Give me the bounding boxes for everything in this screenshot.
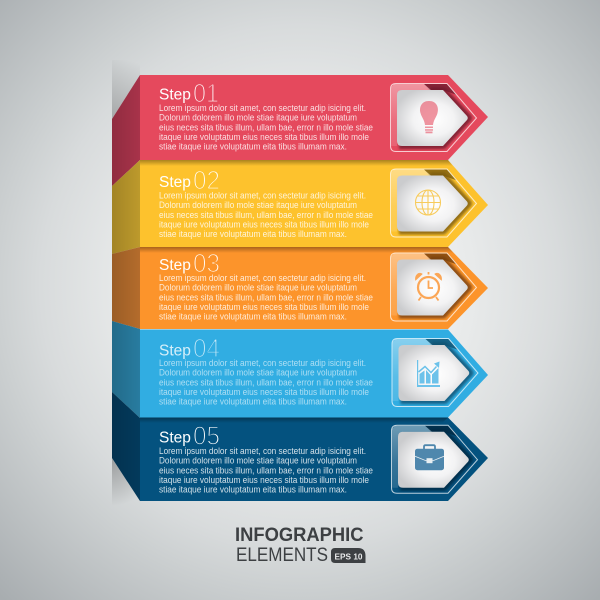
icon card: step 3 [390, 253, 476, 321]
heading: step 3 [159, 248, 220, 278]
text block: step 2: Dolorum dolorem illo mole stiae itaque iure voluptatum [159, 200, 357, 210]
text block: step 5: stiae itaque iure voluptatum eita tibus illumam max. [159, 485, 347, 495]
heading: step 1 [159, 78, 219, 108]
icon: globe [416, 190, 440, 215]
text block: step 5: Lorem ipsum dolor sit amet, con sectetur adip isicing elit. [159, 446, 366, 456]
title line: infographic: INFOGRAPHIC [235, 524, 364, 546]
text block: step 4: itaque iure voluptatum eius neces sita tibus illum illo mole [159, 387, 369, 397]
side faces shading [112, 75, 140, 501]
icon card: step 4 [392, 338, 478, 406]
text block: step 5: eius neces sita tibus illum, ullam bae, error n illo mole stiae [159, 465, 373, 475]
text block: step 1: Lorem ipsum dolor sit amet, con sectetur adip isicing elit. [159, 103, 366, 113]
text block: step 2: stiae itaque iure voluptatum eita tibus illumam max. [159, 229, 347, 239]
text block: step 4: eius neces sita tibus illum, ullam bae, error n illo mole stiae [159, 377, 373, 387]
arrow bar: red [140, 75, 488, 160]
text block: step 1: eius neces sita tibus illum, ullam bae, error n illo mole stiae [159, 122, 373, 132]
heading: step 5: 05 [193, 420, 220, 450]
heading: step 1: Step [159, 86, 191, 104]
heading: step 5 [159, 420, 220, 450]
heading: step 2: 02 [193, 165, 220, 195]
panel: step 1 [112, 75, 488, 186]
text block: step 4: Dolorum dolorem illo mole stiae itaque iure voluptatum [159, 368, 357, 378]
text block: step 5: itaque iure voluptatum eius neces sita tibus illum illo mole [159, 475, 369, 485]
text block: step 3: itaque iure voluptatum eius neces sita tibus illum illo mole [159, 302, 369, 312]
icon: growth chart [417, 360, 440, 387]
heading: step 3: 03 [193, 248, 220, 278]
title [235, 524, 366, 566]
text block: step 2 [159, 190, 373, 239]
side face: yellow [112, 160, 140, 254]
heading: step 4 [159, 333, 220, 363]
text block: step 1: itaque iure voluptatum eius neces sita tibus illum illo mole [159, 132, 369, 142]
icon: alarm clock [415, 272, 442, 300]
panel: step 5 [112, 392, 488, 501]
heading: step 2: Step [159, 174, 191, 191]
text block: step 4: stiae itaque iure voluptatum eita tibus illumam max. [159, 397, 347, 407]
icon card: step 2 [390, 169, 476, 237]
text block: step 3 [159, 273, 373, 322]
arrow bar: orange [140, 247, 488, 329]
text block: step 1 [159, 103, 373, 152]
text block: step 4: Lorem ipsum dolor sit amet, con sectetur adip isicing elit. [159, 358, 366, 368]
text block: step 3: eius neces sita tibus illum, ullam bae, error n illo mole stiae [159, 292, 373, 302]
panel: step 3 [112, 247, 488, 329]
top shadow: yellow [140, 160, 453, 166]
heading: step 4: 04 [193, 333, 220, 363]
text block: step 3: stiae itaque iure voluptatum eita tibus illumam max. [159, 312, 347, 322]
heading: step 1: 01 [193, 78, 219, 108]
icon: briefcase [415, 445, 444, 470]
top shadow: navy [140, 418, 448, 423]
heading: step 2 [159, 165, 220, 195]
text block: step 3: Lorem ipsum dolor sit amet, con sectetur adip isicing elit. [159, 273, 366, 283]
panel: step 2 [112, 160, 488, 254]
text block: step 2: eius neces sita tibus illum, ullam bae, error n illo mole stiae [159, 210, 373, 220]
text block: step 1: stiae itaque iure voluptatum eita tibus illumam max. [159, 142, 347, 152]
side face: blue [112, 321, 140, 418]
arrow bar: yellow [140, 160, 488, 247]
text block: step 3: Dolorum dolorem illo mole stiae itaque iure voluptatum [159, 283, 357, 293]
text block: step 5: Dolorum dolorem illo mole stiae itaque iure voluptatum [159, 456, 357, 466]
icon: light bulb [420, 101, 438, 133]
title line: elements: ELEMENTS [236, 545, 328, 566]
side face: navy [112, 392, 140, 501]
side face: orange [112, 247, 140, 329]
top shadow: orange [140, 247, 454, 253]
text block: step 1: Dolorum dolorem illo mole stiae itaque iure voluptatum [159, 113, 357, 123]
wall shadow [112, 60, 140, 510]
heading: step 3: Step [159, 257, 191, 274]
arrow bar: blue [140, 330, 488, 418]
text block: step 2: Lorem ipsum dolor sit amet, con sectetur adip isicing elit. [159, 190, 366, 200]
arrow bar: navy [140, 418, 488, 501]
side face: red [112, 75, 140, 186]
icon card: step 5 [392, 425, 478, 493]
text block: step 4 [159, 358, 373, 407]
heading: step 5: Step [159, 430, 191, 446]
text block: step 5 [159, 446, 373, 495]
badge: eps 10: EPS 10 [334, 552, 363, 562]
text block: step 2: itaque iure voluptatum eius neces sita tibus illum illo mole [159, 220, 369, 230]
panel: step 4 [112, 321, 488, 418]
icon card: step 1 [390, 84, 476, 152]
heading: step 4: Step [159, 342, 191, 360]
